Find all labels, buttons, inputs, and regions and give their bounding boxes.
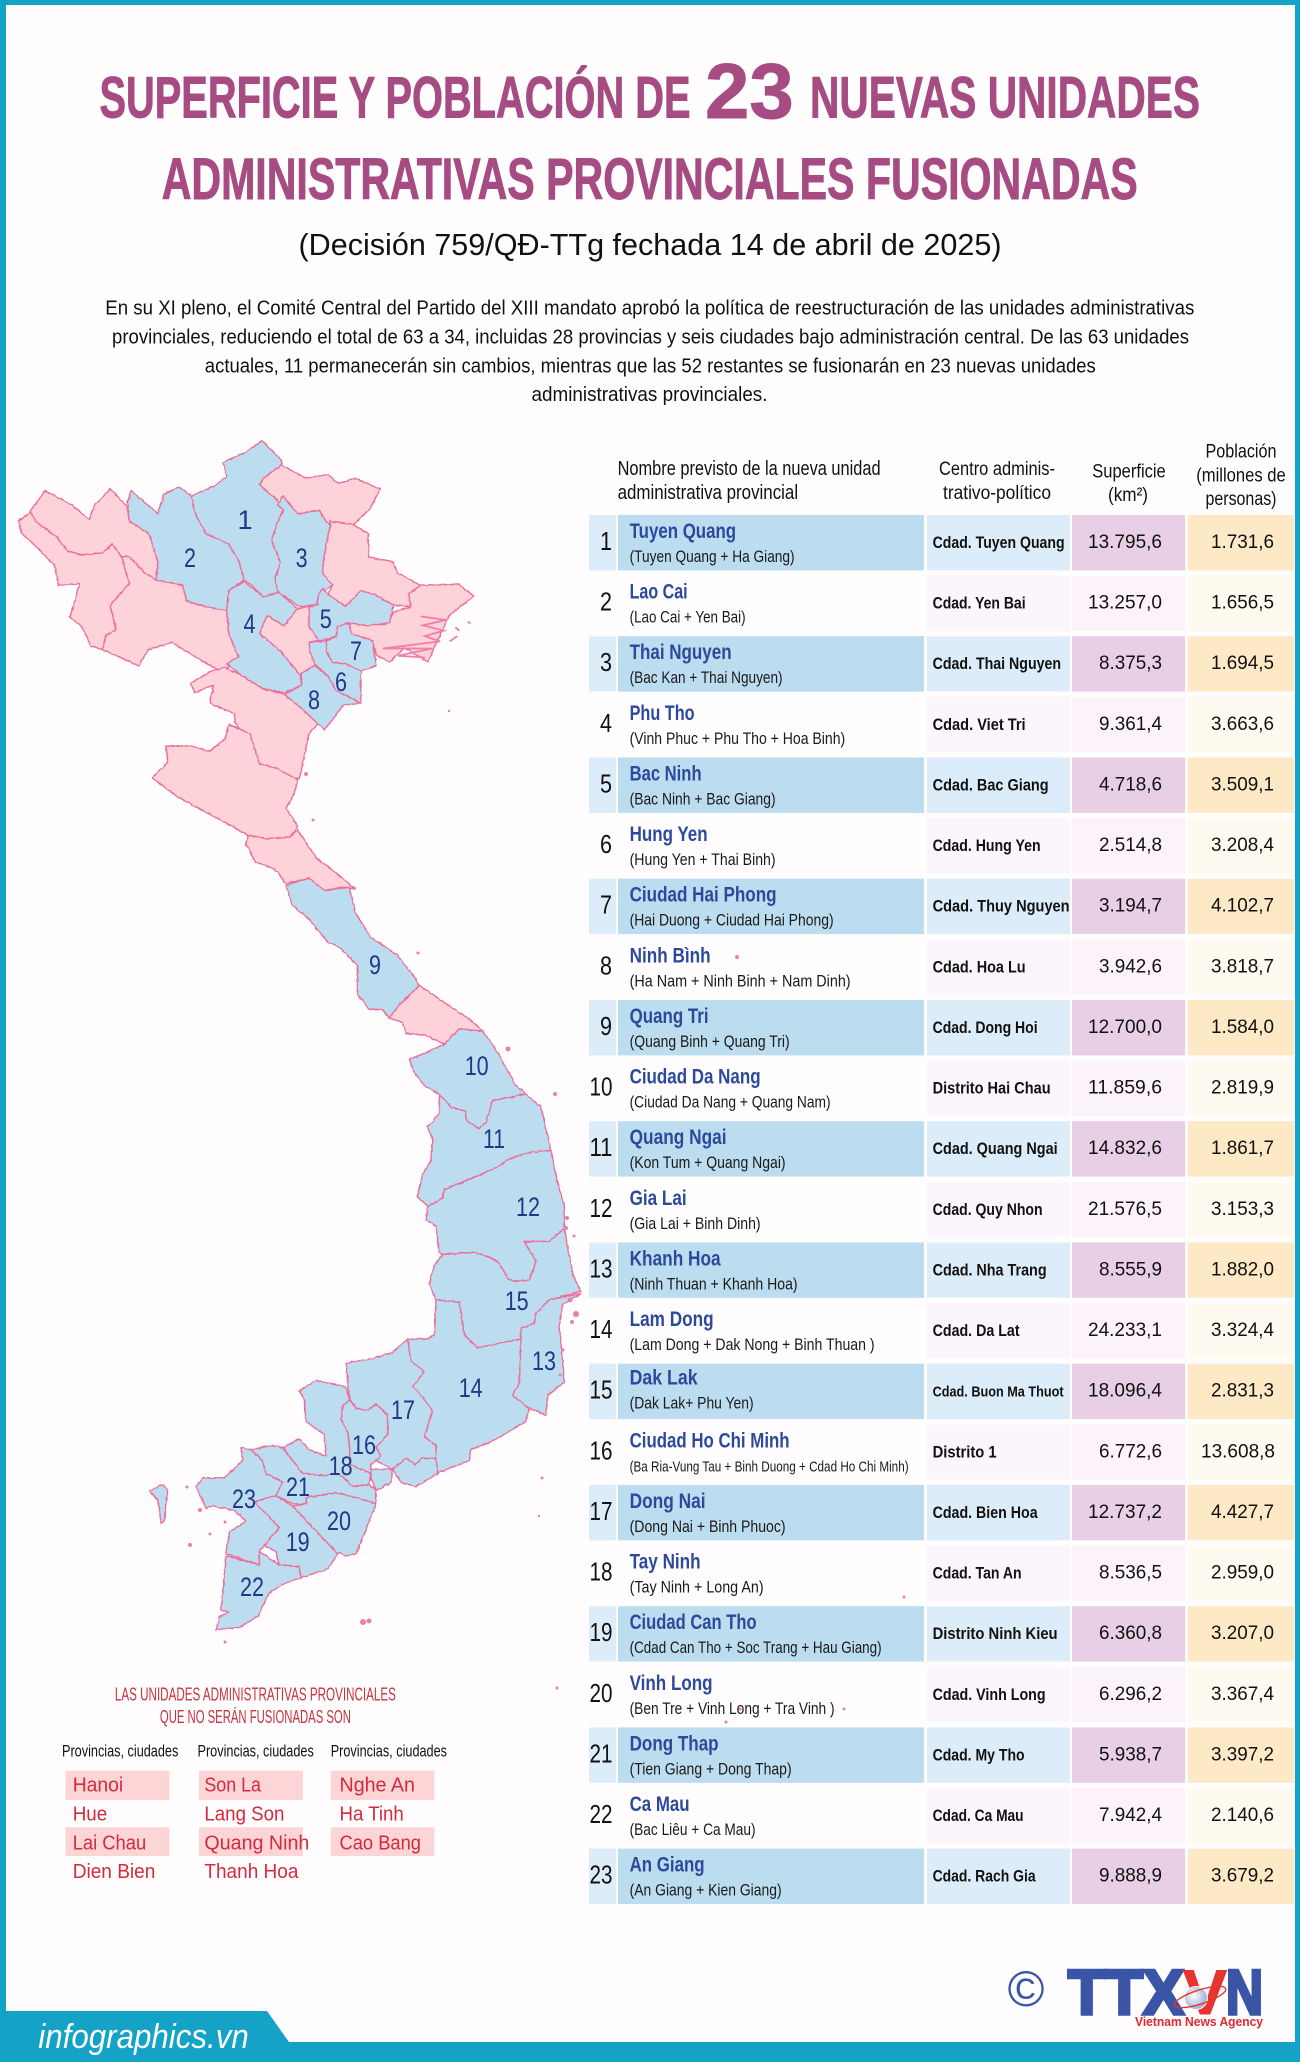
region 13: Khanh Hoa bbox=[513, 1294, 582, 1416]
row 8: Ninh Bình bbox=[630, 944, 711, 967]
map numbers: 1 bbox=[237, 505, 253, 535]
row 2: Cdad. Yen Bai bbox=[933, 594, 1026, 613]
intro paragraph: provinciales, reduciendo el total de 63 a 34, incluidas 28 provincias y seis ciudades bajo administración central. De las 63 unidades bbox=[112, 326, 1189, 348]
intro paragraph: administrativas provinciales. bbox=[532, 384, 768, 406]
region 15: Dak Lak bbox=[430, 1229, 582, 1349]
row 12: (Gia Lai + Binh Dinh) bbox=[630, 1215, 761, 1233]
table header: (millones de bbox=[1196, 466, 1286, 487]
row 23: 3.679,2 bbox=[1211, 1865, 1274, 1887]
row 21 bbox=[589, 1727, 1294, 1783]
legend column 2: Lang Son bbox=[204, 1803, 284, 1826]
coastal islets bbox=[186, 710, 906, 1724]
row 1 bbox=[589, 515, 1294, 570]
row 8: 8 bbox=[600, 950, 612, 980]
region 11: Quang Ngai bbox=[418, 1095, 552, 1208]
row 16: 16 bbox=[590, 1435, 612, 1465]
row 3: 8.375,3 bbox=[1099, 652, 1162, 674]
row 7: Cdad. Thuy Nguyen bbox=[933, 897, 1070, 916]
row 8: (Ha Nam + Ninh Binh + Nam Dinh) bbox=[630, 972, 851, 990]
row 11: 1.861,7 bbox=[1211, 1137, 1274, 1159]
region: Hanoi bbox=[260, 607, 320, 675]
table header: personas) bbox=[1206, 489, 1276, 510]
legend column 3 bbox=[331, 1743, 447, 1856]
row 21: 21 bbox=[590, 1738, 612, 1768]
table header: (km²) bbox=[1108, 485, 1148, 506]
row 23: (An Giang + Kien Giang) bbox=[630, 1882, 782, 1900]
region 19: Can Tho bbox=[255, 1496, 338, 1579]
row 2: (Lao Cai + Yen Bai) bbox=[630, 609, 746, 627]
row 8 bbox=[600, 939, 1294, 995]
legend column 2: Son La bbox=[204, 1774, 262, 1797]
row 13: 8.555,9 bbox=[1099, 1258, 1162, 1280]
region 1: Tuyen Quang bbox=[192, 441, 284, 597]
row 17: 12.737,2 bbox=[1088, 1501, 1162, 1523]
row 4: 4 bbox=[600, 708, 612, 738]
row 20: 6.296,2 bbox=[1099, 1683, 1162, 1705]
legend column 1: Hue bbox=[73, 1803, 107, 1826]
region: Hue bbox=[390, 987, 483, 1045]
row 22: 7.942,4 bbox=[1099, 1804, 1162, 1826]
row 1: Cdad. Tuyen Quang bbox=[933, 533, 1065, 552]
title bbox=[100, 47, 1200, 212]
row 23: Cdad. Rach Gia bbox=[933, 1867, 1036, 1886]
map numbers: 13 bbox=[532, 1346, 556, 1376]
row 13: 1.882,0 bbox=[1211, 1258, 1274, 1280]
row 20: 20 bbox=[590, 1678, 612, 1708]
table header: Superficie bbox=[1092, 462, 1166, 483]
row 7: (Hai Duong + Ciudad Hai Phong) bbox=[630, 912, 834, 930]
islands of Quang Ninh bbox=[383, 616, 471, 657]
map numbers: 19 bbox=[286, 1527, 310, 1557]
row 12: Gia Lai bbox=[630, 1187, 687, 1210]
region 20: Vinh Long bbox=[293, 1494, 377, 1557]
map numbers: 11 bbox=[483, 1124, 505, 1154]
row 6: Hung Yen bbox=[630, 823, 708, 846]
row 4: Cdad. Viet Tri bbox=[933, 715, 1026, 734]
row 19: (Cdad Can Tho + Soc Trang + Hau Giang) bbox=[630, 1639, 882, 1657]
row 17: Cdad. Bien Hoa bbox=[933, 1503, 1038, 1522]
row 2: Lao Cai bbox=[630, 581, 688, 604]
legend column 1: Hanoi bbox=[73, 1774, 123, 1797]
logo: TTXVN: N bbox=[1226, 1958, 1263, 2028]
row 17: 17 bbox=[590, 1496, 612, 1526]
row 10: 10 bbox=[590, 1072, 612, 1102]
region 23: An Giang bbox=[197, 1448, 283, 1565]
region 12: Gia Lai bbox=[427, 1151, 565, 1281]
row 16: 13.608,8 bbox=[1201, 1440, 1275, 1462]
row 18: (Tay Ninh + Long An) bbox=[630, 1578, 764, 1596]
row 5: (Bac Ninh + Bac Giang) bbox=[630, 790, 776, 808]
title: 23 bbox=[705, 47, 794, 135]
map numbers bbox=[184, 505, 556, 1602]
row 21: (Tien Giang + Dong Thap) bbox=[630, 1760, 792, 1778]
map numbers: 2 bbox=[184, 543, 196, 573]
row 9: (Quang Binh + Quang Tri) bbox=[630, 1033, 790, 1051]
row 11: Cdad. Quang Ngai bbox=[933, 1139, 1058, 1158]
row 20: (Ben Tre + Vinh Long + Tra Vinh ) bbox=[630, 1700, 835, 1718]
row 14: (Lam Dong + Dak Nong + Binh Thuan ) bbox=[630, 1336, 875, 1354]
row 2 bbox=[600, 576, 1294, 631]
row 21: Dong Thap bbox=[630, 1732, 719, 1755]
row 16: Distrito 1 bbox=[933, 1442, 997, 1461]
row 18: 2.959,0 bbox=[1211, 1562, 1274, 1584]
row 15: 2.831,3 bbox=[1211, 1380, 1274, 1402]
map numbers: 20 bbox=[327, 1506, 351, 1536]
footer site name: infographics.vn bbox=[38, 2018, 249, 2056]
row 14: 24.233,1 bbox=[1088, 1319, 1162, 1341]
row 11: 11 bbox=[590, 1132, 612, 1162]
row 6: 2.514,8 bbox=[1099, 834, 1162, 856]
row 7: 7 bbox=[600, 890, 612, 920]
title: SUPERFICIE Y POBLACIÓN DE bbox=[100, 66, 690, 131]
row 20: Vinh Long bbox=[630, 1672, 713, 1695]
region: Lang Son bbox=[323, 522, 421, 607]
table header: Centro adminis- bbox=[939, 459, 1055, 480]
row 10: 11.859,6 bbox=[1088, 1077, 1162, 1099]
map numbers: 14 bbox=[459, 1373, 483, 1403]
row 16 bbox=[590, 1424, 1294, 1480]
row 21: 5.938,7 bbox=[1099, 1743, 1162, 1765]
row 6: 3.208,4 bbox=[1211, 834, 1274, 856]
row 12: 3.153,3 bbox=[1211, 1198, 1274, 1220]
row 8: Cdad. Hoa Lu bbox=[933, 957, 1026, 976]
map numbers: 9 bbox=[369, 950, 381, 980]
row 5 bbox=[589, 758, 1294, 813]
legend column 1: Lai Chau bbox=[73, 1831, 146, 1854]
row 16: Ciudad Ho Chi Minh bbox=[630, 1429, 790, 1452]
row 12: 12 bbox=[590, 1193, 612, 1223]
row 19: 19 bbox=[590, 1617, 612, 1647]
row 14 bbox=[590, 1303, 1294, 1358]
legend column 2: Provincias, ciudades bbox=[198, 1743, 314, 1761]
row 9: 9 bbox=[600, 1011, 612, 1041]
row 8: 3.942,6 bbox=[1099, 955, 1162, 977]
legend heading: LAS UNIDADES ADMINISTRATIVAS PROVINCIALES bbox=[115, 1684, 396, 1705]
row 1: (Tuyen Quang + Ha Giang) bbox=[630, 548, 795, 566]
row 11: Quang Ngai bbox=[630, 1126, 727, 1149]
row 9 bbox=[589, 1000, 1294, 1055]
region 22: Ca Mau bbox=[217, 1552, 302, 1631]
row 9: 12.700,0 bbox=[1088, 1016, 1162, 1038]
row 23: 23 bbox=[590, 1860, 612, 1890]
legend column 2 bbox=[198, 1743, 314, 1883]
row 19: Distrito Ninh Kieu bbox=[933, 1624, 1058, 1643]
row 10: 2.819,9 bbox=[1211, 1077, 1274, 1099]
row 9: Cdad. Dong Hoi bbox=[933, 1018, 1038, 1037]
region 5: Bac Ninh bbox=[310, 590, 394, 641]
table header: Nombre previsto de la nueva unidad bbox=[618, 458, 881, 480]
map of Vietnam bbox=[19, 441, 905, 1723]
map numbers: 5 bbox=[320, 604, 332, 634]
region 16: Ho Chi Minh (city part) bbox=[372, 1470, 393, 1492]
map numbers: 4 bbox=[244, 609, 256, 639]
row 2: 1.656,5 bbox=[1211, 592, 1274, 614]
row 22: Cdad. Ca Mau bbox=[933, 1806, 1024, 1825]
row 19: 3.207,0 bbox=[1211, 1622, 1274, 1644]
row 14: Cdad. Da Lat bbox=[933, 1321, 1020, 1340]
map numbers: 12 bbox=[516, 1192, 540, 1222]
region 16: Ho Chi Minh (Binh Duong part) bbox=[342, 1401, 388, 1474]
legend column 3: Cao Bang bbox=[340, 1831, 421, 1854]
region 2: Lao Cai bbox=[128, 488, 245, 611]
row 15: 15 bbox=[590, 1375, 612, 1405]
table header: Población bbox=[1206, 442, 1276, 463]
row 5: Bac Ninh bbox=[630, 762, 702, 786]
row 6: (Hung Yen + Thai Binh) bbox=[630, 851, 776, 869]
island: Phu Quoc bbox=[150, 1485, 168, 1524]
row 1: 1 bbox=[600, 526, 612, 556]
region 3: Thai Nguyen bbox=[272, 497, 333, 607]
row 6: 6 bbox=[600, 829, 612, 859]
region: Ha Tinh bbox=[247, 831, 356, 891]
row 4: 3.663,6 bbox=[1211, 713, 1274, 735]
region: Cao Bang bbox=[260, 466, 381, 527]
row 9: 1.584,0 bbox=[1211, 1016, 1274, 1038]
region 21: Dong Thap bbox=[252, 1446, 377, 1505]
logo: TTXVN: Vietnam News Agency bbox=[1135, 2014, 1264, 2029]
row 11 bbox=[589, 1121, 1294, 1177]
row 11: 14.832,6 bbox=[1088, 1137, 1162, 1159]
row 10 bbox=[590, 1061, 1294, 1116]
row 17: 4.427,7 bbox=[1211, 1501, 1274, 1523]
map numbers: 21 bbox=[286, 1472, 310, 1502]
row 9: Quang Tri bbox=[630, 1005, 709, 1028]
legend column 1 bbox=[62, 1743, 178, 1883]
row 7: 3.194,7 bbox=[1099, 895, 1162, 917]
map numbers: 7 bbox=[350, 636, 362, 666]
region: Dien Bien bbox=[19, 513, 130, 650]
map numbers: 23 bbox=[232, 1484, 256, 1514]
row 7 bbox=[589, 879, 1294, 934]
region: Lai Chau bbox=[31, 490, 159, 581]
row 18: Tay Ninh bbox=[630, 1550, 701, 1574]
table bbox=[589, 442, 1294, 1904]
row 12 bbox=[590, 1182, 1294, 1237]
row 17 bbox=[589, 1485, 1294, 1540]
legend column 1: Provincias, ciudades bbox=[62, 1743, 178, 1761]
region 16: Ho Chi Minh (Ba Ria-Vung Tau part) bbox=[393, 1459, 438, 1487]
region: Son La bbox=[103, 557, 239, 674]
row 18: Cdad. Tan An bbox=[933, 1564, 1022, 1582]
intro paragraph: actuales, 11 permanecerán sin cambios, mientras que las 52 restantes se fusionarán en 23 nuevas unidades bbox=[205, 355, 1096, 377]
row 4 bbox=[600, 697, 1294, 752]
row 5: Cdad. Bac Giang bbox=[933, 776, 1049, 794]
row 15: Cdad. Buon Ma Thuot bbox=[933, 1384, 1064, 1401]
region 17: Dong Nai bbox=[347, 1340, 437, 1470]
map numbers: 6 bbox=[335, 667, 347, 697]
row 11: (Kon Tum + Quang Ngai) bbox=[630, 1154, 786, 1172]
row 22: 22 bbox=[590, 1799, 612, 1829]
row 15: (Dak Lak+ Phu Yen) bbox=[630, 1395, 754, 1413]
row 10: Ciudad Da Nang bbox=[630, 1066, 761, 1089]
row 1: 13.795,6 bbox=[1088, 531, 1162, 553]
row 13: Khanh Hoa bbox=[630, 1247, 721, 1270]
legend heading bbox=[115, 1684, 396, 1727]
row 18 bbox=[590, 1546, 1294, 1601]
legend column 1: Dien Bien bbox=[73, 1860, 155, 1883]
row 22: (Bac Liêu + Ca Mau) bbox=[630, 1821, 756, 1839]
row 12: 21.576,5 bbox=[1088, 1198, 1162, 1220]
row 13: 13 bbox=[590, 1253, 612, 1283]
legend column 3: Ha Tinh bbox=[340, 1803, 404, 1826]
row 15 bbox=[589, 1364, 1294, 1419]
table header bbox=[618, 442, 1286, 510]
row 7: 4.102,7 bbox=[1211, 895, 1274, 917]
row 15: 18.096,4 bbox=[1088, 1380, 1162, 1402]
row 21: Cdad. My Tho bbox=[933, 1745, 1025, 1764]
region 7: Hai Phong bbox=[327, 624, 377, 672]
row 3: Cdad. Thai Nguyen bbox=[933, 654, 1061, 673]
row 3: 1.694,5 bbox=[1211, 652, 1274, 674]
row 13: Cdad. Nha Trang bbox=[933, 1260, 1047, 1279]
row 19: 6.360,8 bbox=[1099, 1622, 1162, 1644]
row 19: Ciudad Can Tho bbox=[630, 1611, 757, 1634]
map numbers: 17 bbox=[391, 1395, 415, 1425]
row 17: Dong Nai bbox=[630, 1490, 706, 1513]
logo: TTXVN: V bbox=[1183, 1958, 1227, 2028]
region: Quang Ninh bbox=[350, 585, 475, 663]
row 3: Thai Nguyen bbox=[630, 641, 732, 664]
row 18: 18 bbox=[590, 1556, 612, 1586]
legend heading: QUE NO SERÁN FUSIONADAS SON bbox=[160, 1706, 351, 1727]
logo: TTXVN: TTX bbox=[1068, 1958, 1184, 2028]
row 16: (Ba Ria-Vung Tau + Binh Duong + Cdad Ho Chi Minh) bbox=[630, 1459, 909, 1475]
logo: TTXVN bbox=[1068, 1958, 1264, 2029]
row 17: (Dong Nai + Binh Phuoc) bbox=[630, 1518, 786, 1536]
row 15: Dak Lak bbox=[630, 1367, 698, 1390]
row 21: 3.397,2 bbox=[1211, 1743, 1274, 1765]
row 5: 3.509,1 bbox=[1211, 774, 1274, 796]
row 18: 8.536,5 bbox=[1099, 1562, 1162, 1584]
table header: administrativa provincial bbox=[618, 482, 798, 504]
row 23: An Giang bbox=[630, 1854, 705, 1877]
region: Thanh Hoa bbox=[191, 668, 320, 779]
panel: unchanged provinces bbox=[62, 1684, 447, 1883]
row 3: (Bac Kan + Thai Nguyen) bbox=[630, 669, 783, 687]
region 8: Ninh Binh bbox=[285, 666, 362, 731]
row 2: 2 bbox=[600, 587, 612, 617]
row 10: (Ciudad Da Nang + Quang Nam) bbox=[630, 1094, 831, 1112]
row 22: 2.140,6 bbox=[1211, 1804, 1274, 1826]
row 3 bbox=[589, 636, 1294, 692]
region: Nghe An bbox=[153, 725, 299, 840]
row 4: (Vinh Phuc + Phu Tho + Hoa Binh) bbox=[630, 730, 845, 748]
map numbers: 15 bbox=[505, 1286, 529, 1316]
row 19 bbox=[589, 1606, 1294, 1662]
icon: copyright: © bbox=[1008, 1961, 1045, 2017]
map numbers: 18 bbox=[329, 1451, 353, 1481]
row 7: Ciudad Hai Phong bbox=[630, 884, 777, 907]
legend column 3: Provincias, ciudades bbox=[331, 1743, 447, 1761]
region 18: Tay Ninh bbox=[283, 1381, 372, 1487]
legend column 2: Thanh Hoa bbox=[204, 1860, 299, 1883]
row 16: 6.772,6 bbox=[1099, 1440, 1162, 1462]
row 6: Cdad. Hung Yen bbox=[933, 836, 1041, 855]
intro paragraph: En su XI pleno, el Comité Central del Partido del XIII mandato aprobó la política de reestructuración de las unidades administrativas bbox=[105, 297, 1194, 319]
row 10: Distrito Hai Chau bbox=[933, 1079, 1051, 1098]
row 6 bbox=[600, 818, 1294, 874]
row 4: Phu Tho bbox=[630, 702, 695, 725]
row 22: Ca Mau bbox=[630, 1793, 690, 1816]
row 13 bbox=[589, 1242, 1294, 1298]
map numbers: 10 bbox=[465, 1051, 489, 1081]
row 4: 9.361,4 bbox=[1099, 713, 1162, 735]
region 9: Quang Tri bbox=[287, 879, 420, 1019]
row 12: Cdad. Quy Nhon bbox=[933, 1200, 1043, 1219]
region 14: Lam Dong bbox=[408, 1301, 530, 1474]
region 4: Phu Tho bbox=[228, 582, 302, 693]
table header: trativo-político bbox=[943, 483, 1051, 504]
region 6: Hung Yen bbox=[310, 641, 362, 704]
row 23 bbox=[589, 1849, 1294, 1904]
row 5: 4.718,6 bbox=[1099, 774, 1162, 796]
row 14: 3.324,4 bbox=[1211, 1319, 1274, 1341]
region 10: Da Nang bbox=[410, 1030, 527, 1130]
map numbers: 3 bbox=[296, 543, 308, 573]
row 20: 3.367,4 bbox=[1211, 1683, 1274, 1705]
row 14: Lam Dong bbox=[630, 1308, 714, 1331]
intro paragraph bbox=[105, 297, 1194, 406]
row 5: 5 bbox=[600, 768, 612, 798]
row 14: 14 bbox=[590, 1314, 612, 1344]
map numbers: 8 bbox=[308, 685, 320, 715]
row 20: Cdad. Vinh Long bbox=[933, 1685, 1046, 1704]
row 3: 3 bbox=[600, 647, 612, 677]
subtitle: (Decisión 759/QĐ-TTg fechada 14 de abril de 2025) bbox=[298, 227, 1002, 262]
legend column 2: Quang Ninh bbox=[204, 1831, 309, 1854]
row 1: 1.731,6 bbox=[1211, 531, 1274, 553]
map numbers: 22 bbox=[240, 1572, 264, 1602]
row 13: (Ninh Thuan + Khanh Hoa) bbox=[630, 1275, 798, 1293]
row 23: 9.888,9 bbox=[1099, 1865, 1162, 1887]
row 20 bbox=[590, 1667, 1294, 1722]
row 2: 13.257,0 bbox=[1088, 592, 1162, 614]
row 1: Tuyen Quang bbox=[630, 520, 736, 543]
map numbers: 16 bbox=[352, 1430, 376, 1460]
row 22 bbox=[590, 1788, 1294, 1843]
legend column 3: Nghe An bbox=[340, 1774, 415, 1797]
row 8: 3.818,7 bbox=[1211, 955, 1274, 977]
